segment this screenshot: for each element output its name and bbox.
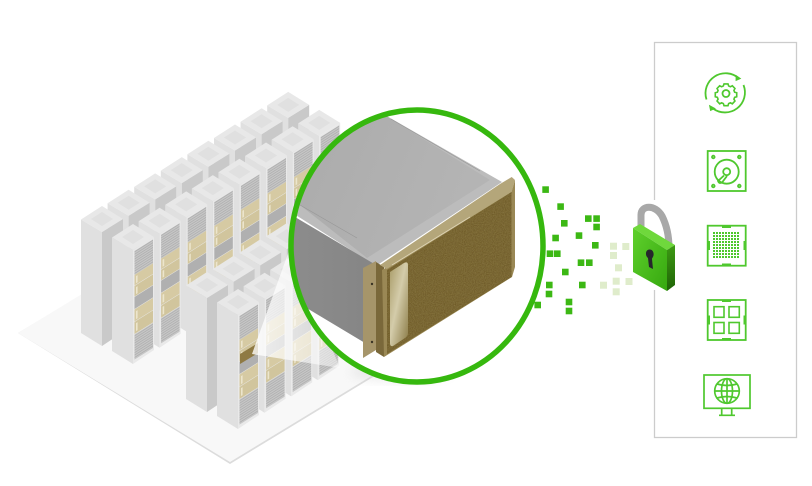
server racks: front row [112,110,340,364]
keyhole [646,250,654,269]
lens ring [291,110,543,382]
floor [18,250,378,464]
faded data squares [600,243,632,295]
icon: processor chip [708,226,746,266]
magnifier light cone [252,248,340,368]
server racks: second block back row [186,223,308,412]
speckled mesh [387,192,512,354]
server racks: second block front row [217,240,339,429]
highlighted server in rack [240,343,258,364]
side panel frame [654,42,796,438]
padlock [633,207,675,291]
chassis top [297,116,502,264]
icon: four module grid [708,300,746,340]
icon: gear with cycle arrows [706,73,745,112]
bezel [380,177,515,269]
chassis front panel [363,177,515,358]
icon: monitor with globe [704,375,750,415]
magnifier lens with server chassis [288,107,546,385]
handle [390,262,408,346]
screws [371,283,373,285]
chassis side [294,218,372,342]
data squares [534,186,600,314]
icon: hard drive [708,151,746,191]
lens shadow [350,362,450,382]
server racks: back row [81,92,309,346]
